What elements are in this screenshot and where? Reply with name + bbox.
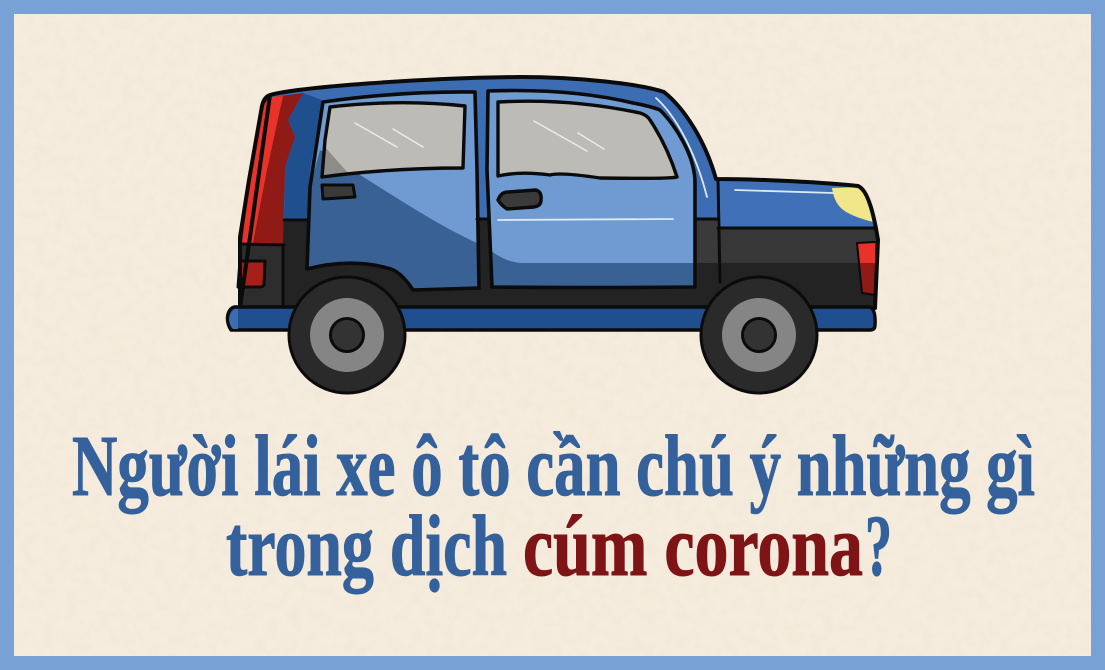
rear window (322, 103, 465, 177)
rear wheel (289, 277, 405, 393)
title line 2: trong dịch (226, 497, 507, 594)
trim lines (240, 180, 876, 306)
headlight (832, 187, 873, 222)
front window (498, 101, 677, 178)
title highlight: cúm corona: cúm corona (523, 497, 863, 594)
lower rear lamp (238, 261, 265, 287)
illustration: blue car (227, 77, 890, 393)
front wheel (701, 277, 817, 393)
front door handle (498, 190, 541, 209)
car body (240, 77, 878, 308)
body outline (240, 77, 878, 308)
title question mark: ? (865, 497, 892, 594)
bumper (227, 307, 875, 330)
front lamp (857, 242, 875, 295)
tail light panel (242, 93, 303, 245)
rear door handle (322, 185, 355, 199)
lower black trim (242, 220, 876, 308)
rear door (307, 92, 479, 290)
front door (487, 90, 695, 288)
hood (717, 180, 875, 227)
body highlights (656, 98, 833, 197)
rear pillar (284, 93, 322, 220)
title (72, 417, 1035, 594)
